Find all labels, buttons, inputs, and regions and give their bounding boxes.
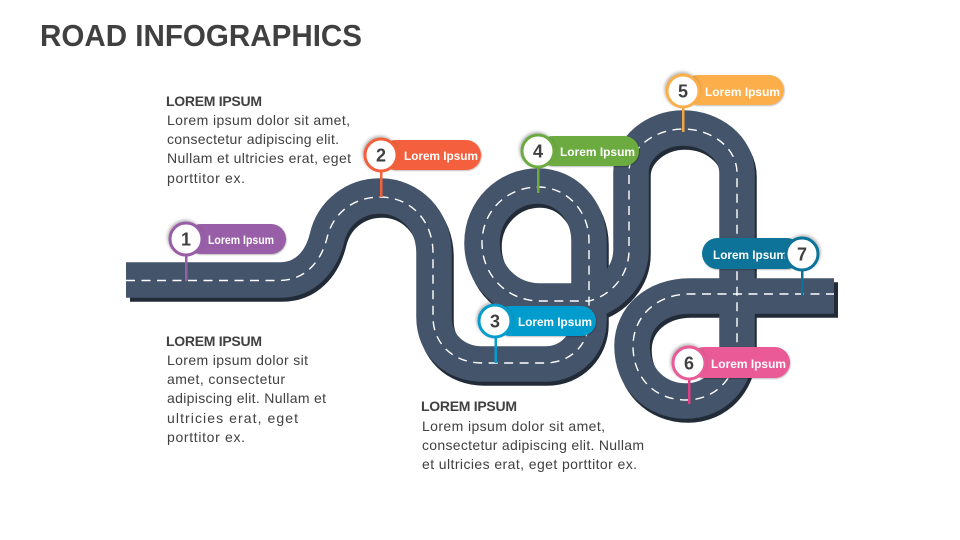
text block: bottom centre: consectetur adipiscing elit. Nullam bbox=[422, 437, 644, 453]
marker 5: orange bbox=[664, 72, 784, 132]
marker 1: purple bbox=[168, 220, 286, 281]
marker 6: pink bbox=[670, 344, 790, 404]
marker 2: red-orange: Lorem Ipsum bbox=[404, 149, 478, 163]
text block: bottom left: ultricies erat, eget bbox=[167, 410, 298, 426]
text block: top left: consectetur adipiscing elit. bbox=[167, 131, 339, 147]
marker 4: green bbox=[520, 132, 639, 193]
text block: bottom left: porttitor ex. bbox=[167, 429, 245, 445]
marker 1: purple: 1 bbox=[181, 230, 191, 250]
marker 7: teal: Lorem Ipsum bbox=[713, 248, 787, 262]
text block: top left: Nullam et ultricies erat, eget bbox=[167, 150, 351, 166]
marker 5: orange: Lorem Ipsum bbox=[705, 85, 780, 99]
marker 3: blue bbox=[476, 302, 596, 363]
marker 3: blue: 3 bbox=[490, 312, 500, 332]
marker 2: red-orange bbox=[362, 136, 481, 197]
text block: bottom left bbox=[166, 333, 326, 445]
marker 7: teal: 7 bbox=[797, 244, 807, 264]
marker 1: purple: Lorem Ipsum bbox=[208, 233, 274, 247]
text block: bottom left: Lorem ipsum dolor sit bbox=[167, 352, 308, 368]
marker 6: pink: Lorem Ipsum bbox=[711, 357, 786, 371]
text block: bottom left: LOREM IPSUM bbox=[166, 333, 262, 349]
marker 4: green: 4 bbox=[533, 142, 543, 162]
text block: bottom left: amet, consectetur bbox=[167, 371, 285, 387]
winding road bbox=[126, 128, 838, 405]
marker 2: red-orange: 2 bbox=[376, 146, 386, 166]
text block: top left: porttitor ex. bbox=[167, 170, 245, 186]
title: ROAD INFOGRAPHICS bbox=[40, 18, 362, 53]
text block: bottom centre: et ultricies erat, eget porttitor ex. bbox=[422, 456, 637, 472]
text block: bottom centre: LOREM IPSUM bbox=[421, 398, 517, 414]
text block: top left: Lorem ipsum dolor sit amet, bbox=[167, 112, 350, 128]
marker 7: teal bbox=[702, 235, 820, 295]
text block: bottom left: adipiscing elit. Nullam et bbox=[167, 390, 326, 406]
marker 6: pink: 6 bbox=[684, 354, 694, 374]
text block: top left bbox=[166, 93, 351, 186]
text block: bottom centre: Lorem ipsum dolor sit amet, bbox=[422, 418, 605, 434]
marker 5: orange: 5 bbox=[678, 82, 688, 102]
marker 3: blue: Lorem Ipsum bbox=[518, 315, 592, 329]
text block: bottom centre bbox=[421, 398, 644, 472]
text block: top left: LOREM IPSUM bbox=[166, 93, 262, 109]
marker 4: green: Lorem Ipsum bbox=[560, 145, 635, 159]
